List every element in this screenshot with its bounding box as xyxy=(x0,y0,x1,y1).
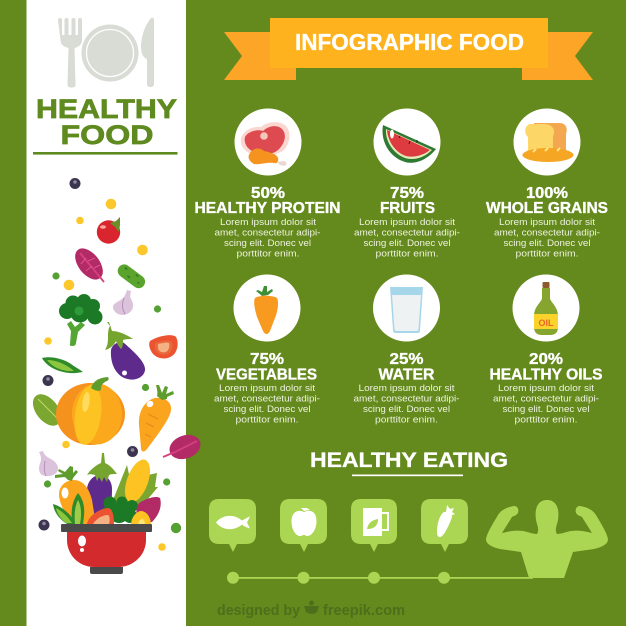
carrot in bowl xyxy=(55,466,96,525)
body text xyxy=(354,216,460,258)
panel: healthy oils xyxy=(490,274,602,424)
peas in bowl xyxy=(53,493,84,524)
body text xyxy=(214,382,320,424)
body text: porttitor enim. xyxy=(516,248,578,258)
icon: broccoli xyxy=(59,294,102,346)
icon: fork, plate and knife xyxy=(58,18,154,88)
icon: tomato slice xyxy=(149,335,178,358)
icon: oil bottle: OIL xyxy=(538,318,554,328)
percentage: 25% xyxy=(390,351,424,368)
icon: eggplant xyxy=(105,322,145,380)
body text: scing elit. Donec vel xyxy=(224,403,310,414)
body text: scing elit. Donec vel xyxy=(224,237,311,248)
icon: glass of water xyxy=(390,287,423,333)
icon: purple leaf xyxy=(70,243,108,285)
body text: Lorem ipsum dolor sit xyxy=(219,382,315,393)
credit: freepik xyxy=(217,600,405,619)
body text: porttitor enim. xyxy=(376,248,438,258)
panel: fruits xyxy=(354,108,460,258)
icon: bowl of vegetables xyxy=(53,453,161,574)
body text: Lorem ipsum dolor sit xyxy=(359,216,455,227)
panel: white column xyxy=(26,0,186,626)
broccoli in bowl xyxy=(101,496,138,523)
body text: Lorem ipsum dolor sit xyxy=(358,382,455,393)
icon: cucumber xyxy=(115,262,148,291)
credit: freepik: designed by xyxy=(217,603,300,619)
label: WATER xyxy=(378,366,434,384)
ribbon title: INFOGRAPHIC FOOD xyxy=(295,29,524,55)
body text: amet, consectetur adipi- xyxy=(494,226,600,238)
label: HEALTHY OILS xyxy=(490,366,602,384)
panel: whole grains xyxy=(486,108,608,258)
credit: freepik: freepik.com xyxy=(323,603,405,619)
tomato slice in bowl xyxy=(87,508,114,525)
ribbon banner xyxy=(224,18,593,80)
body text: Lorem ipsum dolor sit xyxy=(498,382,594,393)
body text: amet, consectetur adipi- xyxy=(493,392,599,404)
icon: green leaf xyxy=(27,389,67,431)
body text: Lorem ipsum dolor sit xyxy=(220,216,316,227)
percentage: 75% xyxy=(250,351,284,368)
heading: healthy food: HEALTHY xyxy=(36,94,177,124)
label: FRUITS xyxy=(380,200,435,217)
percentage: 20% xyxy=(529,351,563,368)
bowl body xyxy=(67,532,146,567)
purple leaf in bowl xyxy=(136,497,161,524)
bubble: fish xyxy=(209,499,256,552)
label: HEALTHY PROTEIN xyxy=(194,200,340,217)
panel: healthy protein xyxy=(194,108,340,258)
icon: garlic xyxy=(113,290,133,315)
corn and greens xyxy=(113,456,158,515)
body text: scing elit. Donec vel xyxy=(502,403,590,414)
icon: oil bottle xyxy=(534,282,558,335)
body text: Lorem ipsum dolor sit xyxy=(499,216,595,227)
body text xyxy=(494,216,600,258)
body text: scing elit. Donec vel xyxy=(504,237,590,248)
body text: amet, consectetur adipi- xyxy=(214,226,320,238)
bubble: mug xyxy=(351,499,397,552)
percentage: 50% xyxy=(251,185,285,202)
panel: vegetables xyxy=(214,274,320,424)
icon: garlic small xyxy=(39,451,58,476)
body text: scing elit. Donec vel xyxy=(363,403,450,414)
berries and peas xyxy=(38,178,181,551)
body text xyxy=(354,382,460,424)
bubble: carrot xyxy=(421,499,468,552)
heading: healthy food: FOOD xyxy=(60,120,154,150)
bubble: apple xyxy=(280,499,327,552)
percentage: 100% xyxy=(526,185,568,202)
yellow fruit in bowl xyxy=(131,511,151,525)
body text: amet, consectetur adipi- xyxy=(354,392,460,404)
heading: healthy food xyxy=(36,94,177,150)
icon: pea pod xyxy=(42,357,83,373)
icon: bread xyxy=(522,123,574,162)
icon: watermelon xyxy=(383,125,436,163)
body text: amet, consectetur adipi- xyxy=(354,226,460,238)
label: WHOLE GRAINS xyxy=(486,200,608,217)
body text: porttitor enim. xyxy=(236,248,300,258)
body text xyxy=(493,382,599,424)
icon: carrot xyxy=(139,385,174,452)
body text: scing elit. Donec vel xyxy=(364,237,450,248)
panel: water xyxy=(354,274,460,424)
icon: tomato xyxy=(97,217,120,244)
heading: healthy eating: HEALTHY EATING xyxy=(310,448,508,472)
body text: porttitor enim. xyxy=(375,414,438,424)
body text: porttitor enim. xyxy=(236,414,298,424)
body text: amet, consectetur adipi- xyxy=(214,392,320,404)
percentage: 75% xyxy=(390,185,424,202)
label: VEGETABLES xyxy=(216,366,317,384)
body text xyxy=(214,216,320,258)
silhouette: muscular figure xyxy=(486,500,608,578)
timeline xyxy=(227,572,533,584)
eggplant in bowl xyxy=(87,453,117,524)
icon: purple leaf right xyxy=(163,431,204,463)
icon: carrot xyxy=(254,286,278,334)
body text: porttitor enim. xyxy=(514,414,578,424)
icon: pumpkin xyxy=(56,377,125,447)
icon: meat and chicken xyxy=(241,122,289,166)
